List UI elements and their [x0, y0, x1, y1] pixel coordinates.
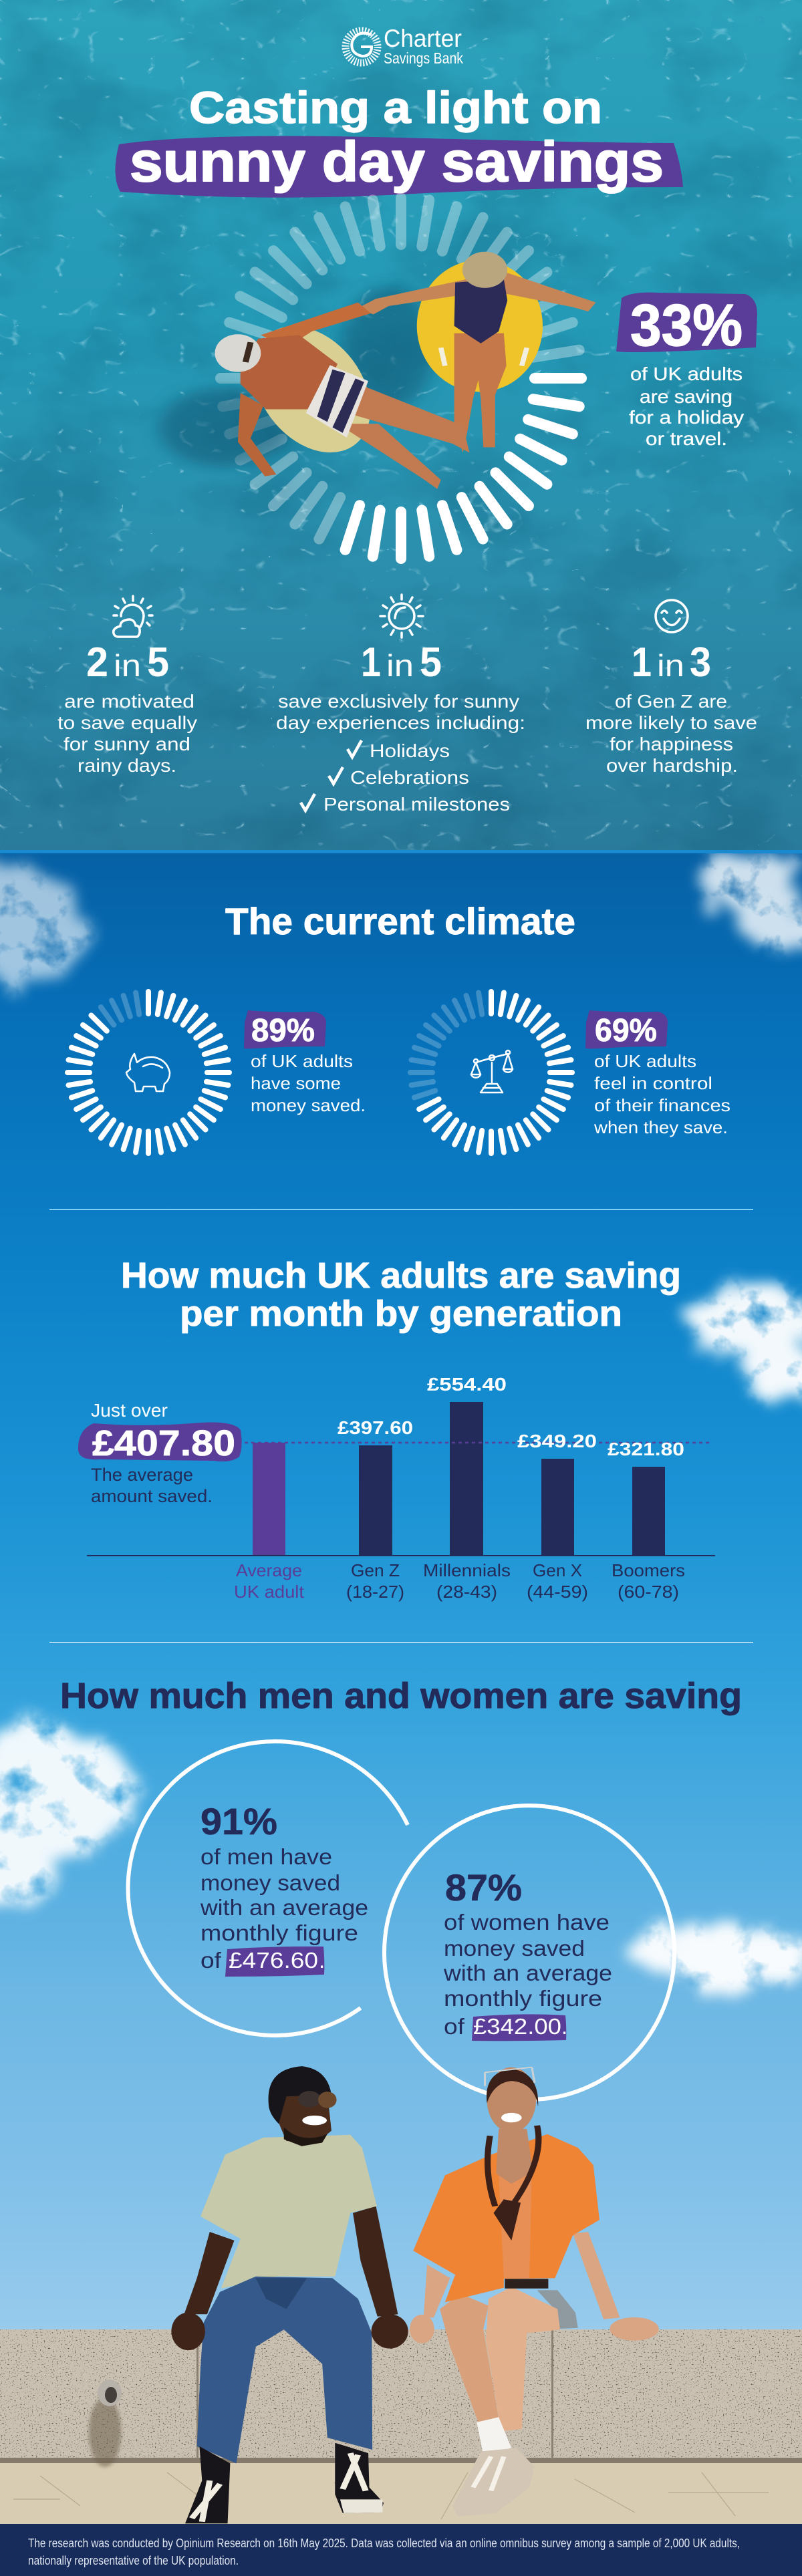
- heading: the current climate: The current climate: [225, 900, 575, 942]
- column: 2 in 5: are motivated: [64, 691, 194, 712]
- circle: men: monthly figure: [200, 1920, 358, 1945]
- heading: how much men and women are saving: How much men and women are saving: [60, 1676, 742, 1716]
- panel: pool water background: [0, 0, 802, 853]
- circle: men: 91%: [200, 1800, 277, 1842]
- column: 1 in 3: [585, 600, 757, 776]
- icon: smile: [656, 600, 688, 632]
- bar chart: savings by generation: (28-43): [436, 1582, 497, 1602]
- callout: average amount saved: [78, 1400, 242, 1506]
- icon: sun: [380, 595, 423, 637]
- column: 1 in 5: 1: [361, 639, 381, 686]
- circle: women: with an average: [443, 1961, 612, 1985]
- stat: 69%: of their finances: [594, 1095, 730, 1115]
- cloud: top right: [698, 852, 802, 949]
- bar chart: savings by generation: £321.80: [608, 1439, 684, 1459]
- bar chart: savings by generation: (44-59): [527, 1582, 588, 1602]
- column: 2 in 5: for sunny and: [63, 734, 190, 754]
- highlight: £342.00: £342.00: [473, 2014, 561, 2039]
- column: 1 in 3: 1: [632, 639, 652, 686]
- panel: sky background: [0, 850, 802, 2527]
- stat: 89%: [244, 1010, 366, 1115]
- circle: women: money saved: [444, 1936, 585, 1961]
- ring: 69%: [410, 992, 572, 1153]
- column: 2 in 5: to save equally: [57, 712, 197, 733]
- column: 1 in 5: 5: [420, 639, 442, 686]
- column: 1 in 3: more likely to save: [585, 712, 757, 733]
- title: Casting a light on: [189, 83, 602, 133]
- bar chart: savings by generation: £349.20: [517, 1431, 597, 1451]
- bar chart: savings by generation: £397.60: [338, 1417, 413, 1438]
- column: 1 in 3: over hardship.: [606, 755, 738, 776]
- column: 2 in 5: 2: [86, 639, 108, 686]
- heading: how much UK adults are saving per month by generation: How much UK adults are saving: [121, 1256, 681, 1296]
- stat: 89%: of UK adults: [251, 1051, 353, 1071]
- column: 2 in 5: 5: [147, 639, 169, 686]
- circle: women: of women have: [444, 1910, 610, 1935]
- bar chart: savings by generation: Millennials: [423, 1560, 511, 1580]
- bar chart: savings by generation: Boomers: [612, 1560, 685, 1580]
- callout: average amount saved: Just over: [91, 1400, 168, 1421]
- stat: 33% saving for holiday: or travel.: [646, 428, 727, 449]
- stat: 33% saving for holiday: of UK adults: [630, 364, 743, 384]
- footer: research note: [0, 2524, 802, 2576]
- stat: 69%: feel in control: [594, 1073, 712, 1093]
- circle: women: monthly figure: [444, 1986, 602, 2011]
- bar chart: savings by generation: Gen Z: [351, 1560, 400, 1580]
- column: 1 in 3: of Gen Z are: [615, 691, 727, 712]
- man: [171, 2066, 408, 2523]
- bar chart: savings by generation: UK adult: [234, 1582, 305, 1602]
- circle: men: with an average: [200, 1895, 368, 1920]
- stat: 69%: when they save.: [593, 1117, 728, 1137]
- stat: 33% saving for holiday: for a holiday: [629, 407, 744, 428]
- column: 1 in 5: in: [386, 648, 414, 683]
- column: 1 in 3: 3: [690, 639, 711, 686]
- circle: men: of men have: [200, 1844, 332, 1869]
- column: 1 in 3: in: [657, 648, 684, 683]
- logo: Charter Savings Bank: [346, 25, 463, 67]
- highlight: £476.60: .: [319, 1948, 325, 1973]
- list: holidays, celebrations, personal milestones: Personal milestones: [323, 794, 510, 815]
- title: sunny day savings: [130, 130, 664, 193]
- logo: Charter Savings Bank: Charter: [384, 25, 462, 52]
- list: holidays, celebrations, personal milestones: Holidays: [370, 740, 450, 761]
- icon: sun behind cloud: [114, 596, 152, 637]
- stat: 69%: of UK adults: [594, 1051, 696, 1071]
- column: 1 in 3: for happiness: [610, 734, 733, 754]
- bar chart: savings by generation: (18-27): [346, 1582, 404, 1602]
- photo: man and woman sitting on wall: [171, 2066, 659, 2523]
- callout: average amount saved: £407.80: [92, 1423, 235, 1463]
- icon: piggy bank: [126, 1054, 170, 1091]
- heading: how much UK adults are saving per month by generation: [121, 1256, 681, 1334]
- woman: [410, 2067, 659, 2517]
- highlight: £342.00: .: [561, 2014, 567, 2039]
- stat: 69%: [585, 1010, 730, 1137]
- column: 1 in 5: [276, 595, 525, 815]
- highlight: £476.60: [225, 1947, 325, 1977]
- heading: how much UK adults are saving per month by generation: per month by generation: [180, 1294, 622, 1334]
- sun ray ring: faded rays: [221, 198, 579, 539]
- logo: Charter Savings Bank: Savings Bank: [384, 49, 463, 67]
- bar chart: savings by generation: £554.40: [427, 1374, 507, 1395]
- circle: women: [384, 1806, 674, 2100]
- callout: average amount saved: The average: [91, 1465, 193, 1485]
- bar chart: savings by generation: Gen X: [533, 1560, 582, 1580]
- stat: 33% saving for holiday: [616, 292, 757, 449]
- bar chart: savings by generation: Average: [236, 1560, 302, 1580]
- photo: couple floating on yellow rings: [158, 252, 596, 489]
- column: 1 in 5: day experiences including:: [276, 712, 525, 733]
- highlight: £476.60: £476.60: [229, 1948, 318, 1973]
- callout: average amount saved: amount saved.: [91, 1486, 213, 1506]
- sun ray ring: solid rays 33%: [346, 378, 581, 559]
- list: holidays, celebrations, personal milestones: [301, 740, 510, 815]
- stat: 69%: 69%: [595, 1013, 657, 1048]
- cloud: right of circles: [637, 1926, 802, 1990]
- list: holidays, celebrations, personal milestones: Celebrations: [350, 767, 469, 788]
- circle: men: of: [200, 1948, 222, 1973]
- circle: women: 87%: [445, 1866, 522, 1908]
- stat: 89%: money saved.: [251, 1095, 366, 1115]
- stat: 33% saving for holiday: are saving: [640, 386, 732, 407]
- bar chart: savings by generation: (60-78): [618, 1582, 679, 1602]
- circle: men: [128, 1741, 408, 2035]
- column: 2 in 5: rainy days.: [78, 755, 176, 776]
- title: [115, 83, 683, 198]
- bar chart: savings by generation: [87, 1374, 715, 1602]
- icon: balance scales: [471, 1050, 513, 1093]
- column: 2 in 5: [57, 596, 197, 776]
- cloud: left of climate heading: [0, 862, 87, 989]
- footer: research note: nationally representative of the UK population.: [28, 2554, 239, 2567]
- photo: concrete wall: [0, 2329, 802, 2525]
- ring: 89%: [68, 992, 229, 1153]
- stat: 33% saving for holiday: 33%: [630, 292, 743, 358]
- stat: 89%: 89%: [251, 1013, 315, 1048]
- column: 1 in 5: save exclusively for sunny: [278, 691, 519, 712]
- circle: men: money saved: [200, 1870, 340, 1895]
- cloud: beside generation heading: [688, 1290, 802, 1403]
- cloud: left of circles: [0, 1717, 134, 1908]
- column: 2 in 5: in: [114, 648, 141, 683]
- title highlight: purple brush: [115, 136, 683, 198]
- stat: 89%: have some: [251, 1073, 341, 1093]
- circle: women: of: [444, 2014, 465, 2039]
